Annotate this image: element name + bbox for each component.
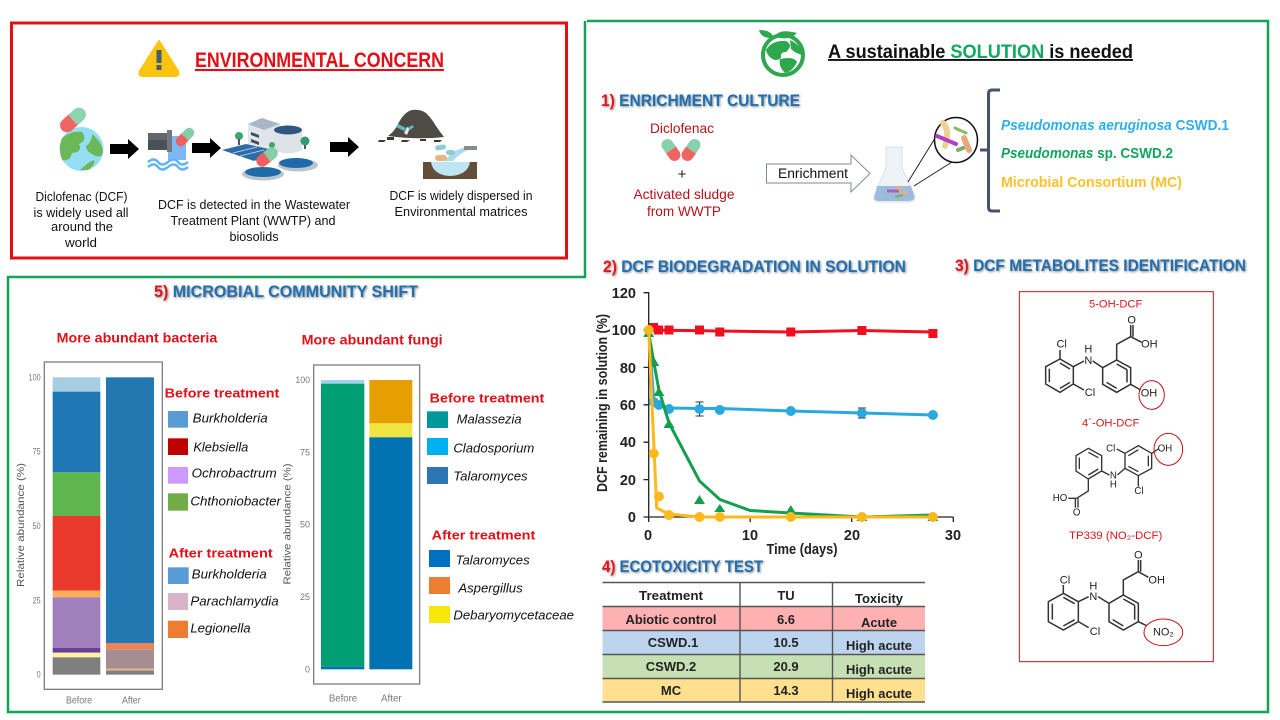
text: diclofenac use: is widely used all — [34, 206, 128, 220]
table header — [639, 588, 904, 606]
text: diclofenac use: around the — [51, 220, 113, 234]
row: MC: 14.3 — [773, 683, 799, 698]
text: DCF dispersed: Environmental matrices — [394, 205, 528, 219]
axis ticks: 25 — [33, 595, 41, 605]
axis ticks: 50 — [300, 520, 310, 530]
row: CSWD.2 — [646, 659, 912, 677]
text: diclofenac use: world — [64, 236, 97, 250]
icon: wastewater treatment plant — [222, 118, 318, 180]
heading: 5 microbial community shift: 5) MICROBIAL COMMUNITY SHIFT — [154, 282, 419, 301]
legend: before treatment — [165, 385, 282, 511]
molecule: 5-OH-DCF: OH — [1141, 388, 1157, 400]
row: MC: MC — [661, 683, 682, 698]
legend: after treatment: Legionella — [190, 621, 251, 636]
panel: environmental concern — [12, 23, 566, 258]
molecule: TP339: NO₂ — [1153, 627, 1174, 639]
molecule: 4'-OH-DCF: OH — [1158, 444, 1172, 455]
icon: warning triangle — [139, 41, 179, 76]
legend: after treatment: Burkholderia — [192, 566, 267, 581]
arrow: plant to environment — [330, 137, 359, 157]
arrow: globe to pipe — [110, 139, 139, 159]
arrow: pipe to plant — [192, 138, 221, 158]
molecule: 5-OH-DCF: OH — [1141, 338, 1158, 350]
table: ecotoxicity — [602, 582, 925, 702]
molecule: 4'-OH-DCF: H — [1110, 480, 1117, 491]
y tick labels: 40 — [620, 435, 636, 451]
label: 4'-OH-DCF: 4´-OH-DCF — [1082, 418, 1140, 430]
series: CSWD.1 — [649, 330, 938, 420]
row: CSWD.2: 20.9 — [773, 659, 799, 674]
bracket — [980, 90, 1000, 211]
icon: soil heap and water body — [378, 110, 477, 179]
axis ticks: 100 — [295, 375, 310, 385]
series: abiotic control — [649, 323, 937, 338]
legend: isolated strains — [1001, 117, 1229, 191]
y tick labels: 100 — [612, 323, 636, 339]
legend: before treatment: Klebsiella — [193, 440, 248, 455]
y tick labels: 120 — [612, 286, 636, 302]
legend: before treatment: Talaromyces — [453, 469, 528, 484]
legend: before treatment: Malassezia — [457, 411, 522, 426]
molecule: 4'-OH-DCF: Cl — [1106, 444, 1115, 455]
chart axes — [644, 293, 953, 522]
axis category labels: After — [381, 694, 402, 705]
axis category labels: Before — [66, 695, 92, 706]
molecule: TP339: O — [1134, 549, 1143, 561]
icon: microscope zoom on bacteria — [908, 118, 978, 186]
text: activated sludge: from WWTP — [647, 203, 721, 219]
text: diclofenac use — [34, 190, 128, 250]
molecule: 5-OH-DCF: O — [1127, 314, 1136, 326]
legend: after treatment — [429, 527, 574, 623]
heading: more abundant fungi: More abundant fungi — [302, 331, 443, 347]
text: activated sludge: Activated sludge — [634, 186, 735, 202]
legend: isolated strains: Microbial Consortium (MC) — [1001, 174, 1182, 191]
text: DCF dispersed: DCF is widely dispersed in — [390, 189, 533, 203]
row: CSWD.1 — [648, 635, 912, 653]
molecule: TP339: Cl — [1090, 626, 1100, 638]
molecule: 4'-OH-DCF: N — [1110, 470, 1117, 481]
text: DCF detected in WWTP — [158, 198, 350, 244]
row: MC — [661, 683, 912, 701]
axis ticks: 75 — [33, 447, 41, 457]
molecule: 5-OH-DCF: H — [1084, 344, 1092, 356]
bar: after — [369, 380, 412, 669]
table header: TU — [777, 588, 795, 603]
axis ticks: 0 — [37, 670, 41, 680]
row: CSWD.2: CSWD.2 — [646, 659, 696, 674]
table header: Treatment — [639, 588, 704, 603]
series: microbial consortium — [644, 325, 938, 522]
icon: pills — [659, 137, 703, 163]
axis ticks: 50 — [33, 521, 41, 531]
heading: 2 DCF biodegradation: 2) DCF BIODEGRADATION IN SOLUTION — [603, 257, 906, 276]
axis ticks: 75 — [300, 447, 310, 457]
x tick labels: 20 — [844, 528, 860, 544]
text: diclofenac use: Diclofenac (DCF) — [36, 190, 128, 204]
label: TP339: TP339 (NO₂-DCF) — [1069, 530, 1162, 542]
x axis title: Time (days) — [766, 542, 838, 558]
text: plus: + — [678, 166, 687, 183]
x tick labels: 30 — [945, 528, 961, 544]
y tick labels: 20 — [620, 473, 636, 489]
molecule: 4'-OH-DCF — [1053, 433, 1183, 519]
row: abiotic control: Abiotic control — [626, 612, 716, 627]
chart: DCF remaining line chart — [595, 286, 961, 558]
y axis title: Relative abundance (%) — [16, 463, 27, 587]
axis category labels: Before — [329, 694, 357, 705]
axis ticks — [29, 372, 41, 680]
legend: after treatment: Aspergillus — [457, 581, 523, 596]
molecule: TP339: Cl — [1060, 574, 1070, 586]
label: 5-OH-DCF: 5-OH-DCF — [1089, 299, 1143, 311]
series: CSWD.2 — [643, 328, 938, 521]
legend: isolated strains: Pseudomonas sp. CSWD.2 — [1001, 145, 1173, 162]
legend: after treatment: Parachlamydia — [190, 593, 279, 608]
molecule: 5-OH-DCF: Cl — [1056, 338, 1067, 350]
legend: before treatment — [427, 391, 545, 484]
row: abiotic control — [626, 612, 897, 630]
molecule: 4'-OH-DCF: O — [1073, 508, 1081, 519]
axis category labels — [329, 694, 402, 705]
row: CSWD.2: High acute — [846, 662, 912, 677]
y axis title: DCF remaining in solution (%) — [595, 314, 611, 492]
molecule: 5-OH-DCF — [1046, 314, 1164, 409]
text: DCF detected in WWTP: biosolids — [230, 230, 278, 244]
molecule: TP339 — [1048, 549, 1183, 646]
y tick labels: 80 — [620, 361, 636, 377]
row: MC: High acute — [846, 686, 912, 701]
axis ticks: 25 — [300, 592, 310, 602]
icon: enrichment flask — [874, 147, 915, 202]
molecule: TP339: H — [1089, 580, 1097, 592]
molecule: TP339: OH — [1148, 574, 1165, 586]
axis ticks — [295, 375, 310, 674]
text: DCF dispersed — [390, 189, 533, 219]
row: CSWD.1: High acute — [846, 638, 912, 653]
y axis title: Relative abundance (%) — [283, 463, 294, 584]
icon: globe with pill — [57, 105, 104, 171]
heading: sustainable solution: A sustainable SOLUTION is needed — [828, 42, 1133, 63]
row: CSWD.1: 10.5 — [773, 635, 799, 650]
table header: Toxicity — [855, 591, 904, 606]
molecule: 5-OH-DCF: Cl — [1085, 387, 1095, 399]
arrow: enrichment — [766, 155, 870, 192]
legend: after treatment: Debaryomycetaceae — [453, 607, 574, 622]
row: abiotic control: Acute — [861, 615, 897, 630]
heading: 4 ecotoxicity test: 4) ECOTOXICITY TEST — [602, 557, 764, 576]
bar: before — [53, 377, 100, 675]
x tick labels: 0 — [644, 528, 652, 544]
axis ticks: 100 — [29, 372, 41, 382]
y tick labels — [612, 286, 636, 526]
icon: green earth with leaves — [759, 30, 803, 75]
x tick labels: 10 — [742, 528, 758, 544]
molecule: 4'-OH-DCF: Cl — [1134, 486, 1144, 497]
legend: before treatment: Chthoniobacter — [190, 493, 282, 508]
legend: after treatment: After treatment — [432, 527, 536, 542]
text: DCF detected in WWTP: DCF is detected in the Wastewater — [158, 198, 350, 212]
molecule: TP339: N — [1089, 591, 1097, 603]
row: abiotic control: 6.6 — [777, 612, 795, 627]
molecule: 5-OH-DCF: N — [1084, 355, 1092, 367]
y tick labels: 0 — [628, 510, 636, 526]
heading: more abundant bacteria: More abundant bacteria — [57, 330, 218, 346]
bar: after — [106, 377, 154, 675]
molecule: 4'-OH-DCF: HO — [1053, 493, 1068, 504]
legend: before treatment: Before treatment — [430, 391, 545, 406]
legend: before treatment: Cladosporium — [453, 441, 534, 456]
x tick labels — [644, 528, 961, 544]
panel: fungi chart and legend — [283, 331, 574, 705]
axis category labels: After — [122, 695, 141, 706]
chart: fungi stacked bars — [283, 365, 420, 705]
y tick labels: 60 — [620, 398, 636, 414]
arrow: enrichment: Enrichment — [778, 165, 848, 181]
panel: bacteria chart and legend — [16, 330, 282, 706]
legend: after treatment: After treatment — [169, 545, 273, 560]
axis ticks: 0 — [305, 664, 310, 674]
legend: after treatment: Talaromyces — [456, 552, 530, 567]
legend: before treatment: Burkholderia — [193, 411, 268, 426]
legend: before treatment: Ochrobactrum — [192, 465, 277, 480]
bar: before — [321, 380, 364, 669]
legend: isolated strains: Pseudomonas aeruginosa CSWD.1 — [1001, 117, 1229, 134]
icon: discharge pipe with pill — [148, 126, 196, 170]
text: DCF detected in WWTP: Treatment Plant (WWTP) and — [170, 214, 336, 228]
axis category labels — [66, 695, 141, 706]
row: CSWD.1: CSWD.1 — [648, 635, 698, 650]
legend: after treatment — [168, 545, 279, 638]
panel: enrichment inputs — [634, 120, 735, 219]
heading: 3 DCF metabolites: 3) DCF METABOLITES IDENTIFICATION — [955, 256, 1246, 275]
heading: 1 enrichment culture: 1) ENRICHMENT CULTURE — [601, 91, 800, 110]
text: activated sludge — [634, 186, 735, 219]
legend: before treatment: Before treatment — [165, 385, 280, 400]
panel: metabolite structures — [1019, 292, 1213, 662]
chart: bacteria stacked bars — [16, 362, 162, 706]
text: diclofenac: Diclofenac — [650, 120, 714, 136]
heading: environmental concern: ENVIRONMENTAL CONCERN — [195, 49, 444, 72]
